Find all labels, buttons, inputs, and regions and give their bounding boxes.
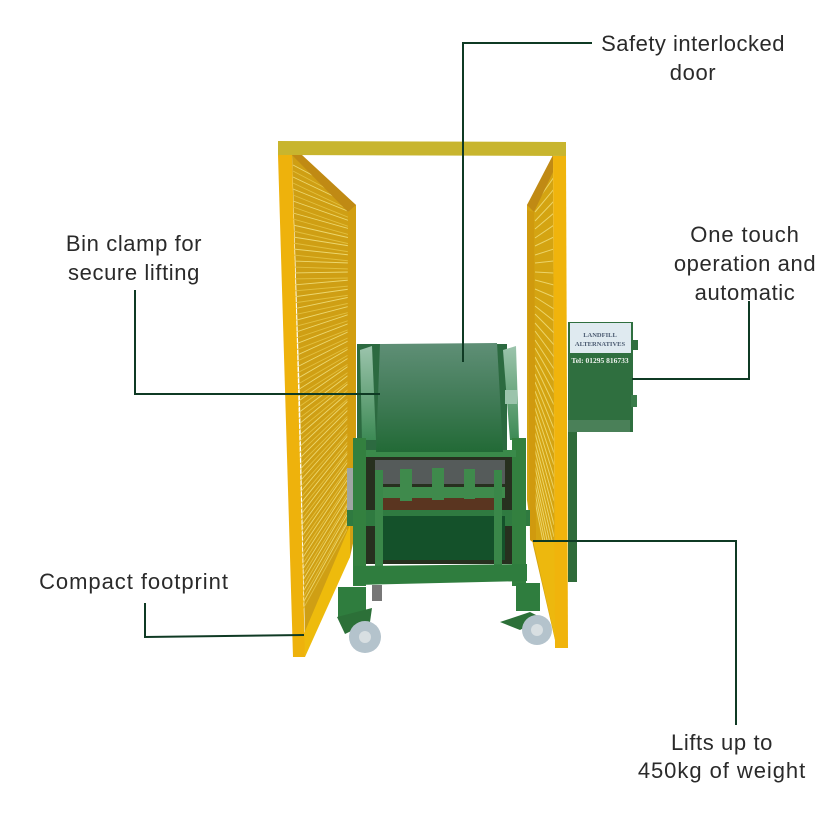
machine frame <box>347 344 530 586</box>
callout: lifting capacity: 450kg of weight <box>638 758 806 783</box>
left safety door <box>278 155 356 657</box>
right safety door <box>527 155 568 648</box>
callout: bin clamp: Bin clamp for <box>66 231 202 256</box>
callout: one touch operation: One touch <box>690 222 800 247</box>
tipping door <box>376 343 503 452</box>
callout: compact footprint: Compact footprint <box>39 569 229 594</box>
callout: one touch operation: operation and <box>674 251 816 276</box>
control box: LANDFILL <box>583 332 617 339</box>
callout: bin clamp <box>66 231 380 394</box>
callout: one touch operation: automatic <box>695 280 795 305</box>
callout: safety interlocked door: Safety interlocked <box>601 31 785 56</box>
right castor wheel <box>500 583 552 645</box>
control box <box>568 322 638 582</box>
top yellow bar <box>278 141 566 156</box>
callout: bin clamp: secure lifting <box>68 260 200 285</box>
callout: safety interlocked door: door <box>670 60 716 85</box>
callout: one touch operation <box>632 222 816 379</box>
callout: lifting capacity: Lifts up to <box>671 730 773 755</box>
callout: lifting capacity <box>533 541 806 783</box>
control box: ALTERNATIVES <box>575 341 625 348</box>
callout: safety interlocked door <box>463 31 785 362</box>
left castor wheel <box>337 585 382 653</box>
callout: compact footprint <box>39 569 304 637</box>
control box: Tel: 01295 816733 <box>571 356 629 365</box>
illustration: bin lifter machine <box>278 141 638 657</box>
